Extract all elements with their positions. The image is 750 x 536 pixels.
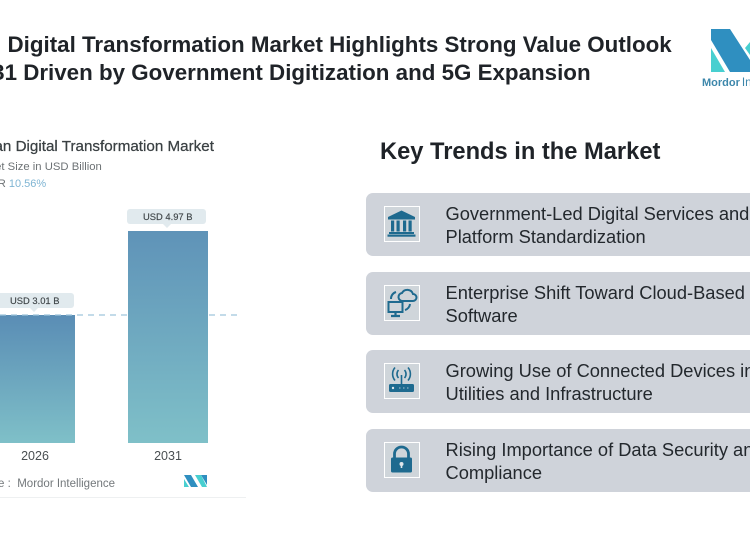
heading: key trends: Key Trends in the Market bbox=[380, 139, 660, 165]
chart panel: market size bbox=[0, 130, 246, 498]
value label 2026: USD 3.01 B bbox=[10, 295, 60, 306]
card text: Compliance bbox=[446, 462, 542, 483]
card text: Government-Led Digital Services and bbox=[446, 203, 749, 224]
card text: Growing Use of Connected Devices in bbox=[446, 360, 750, 381]
value label 2026 bbox=[0, 293, 74, 308]
card text bbox=[446, 360, 750, 404]
value label 2031: USD 4.97 B bbox=[143, 211, 193, 222]
year label 2031: 2031 bbox=[154, 449, 182, 463]
bar 2026 bbox=[0, 315, 75, 443]
icon: cloud and monitor bbox=[384, 285, 420, 321]
card text: Platform Standardization bbox=[446, 226, 646, 247]
title bbox=[0, 32, 672, 85]
dashed reference line bbox=[0, 314, 237, 316]
year label 2026: 2026 bbox=[21, 449, 49, 463]
card: connected devices bbox=[366, 350, 750, 413]
small logo bbox=[184, 475, 207, 487]
logo: Mordor Intelligence bbox=[702, 29, 750, 89]
value label 2031 bbox=[127, 209, 206, 224]
icon: padlock bbox=[384, 442, 420, 478]
card text: Software bbox=[446, 305, 518, 326]
icon: government building bbox=[384, 206, 420, 242]
card text bbox=[446, 282, 745, 326]
bar 2031 bbox=[128, 231, 208, 443]
card text: Enterprise Shift Toward Cloud-Based bbox=[446, 282, 745, 303]
card text bbox=[446, 203, 749, 247]
card: cloud software bbox=[366, 272, 750, 335]
card text: Utilities and Infrastructure bbox=[446, 383, 653, 404]
card: government services bbox=[366, 193, 750, 256]
icon: wireless router bbox=[384, 363, 420, 399]
card text bbox=[446, 439, 750, 483]
card: data security bbox=[366, 429, 750, 492]
